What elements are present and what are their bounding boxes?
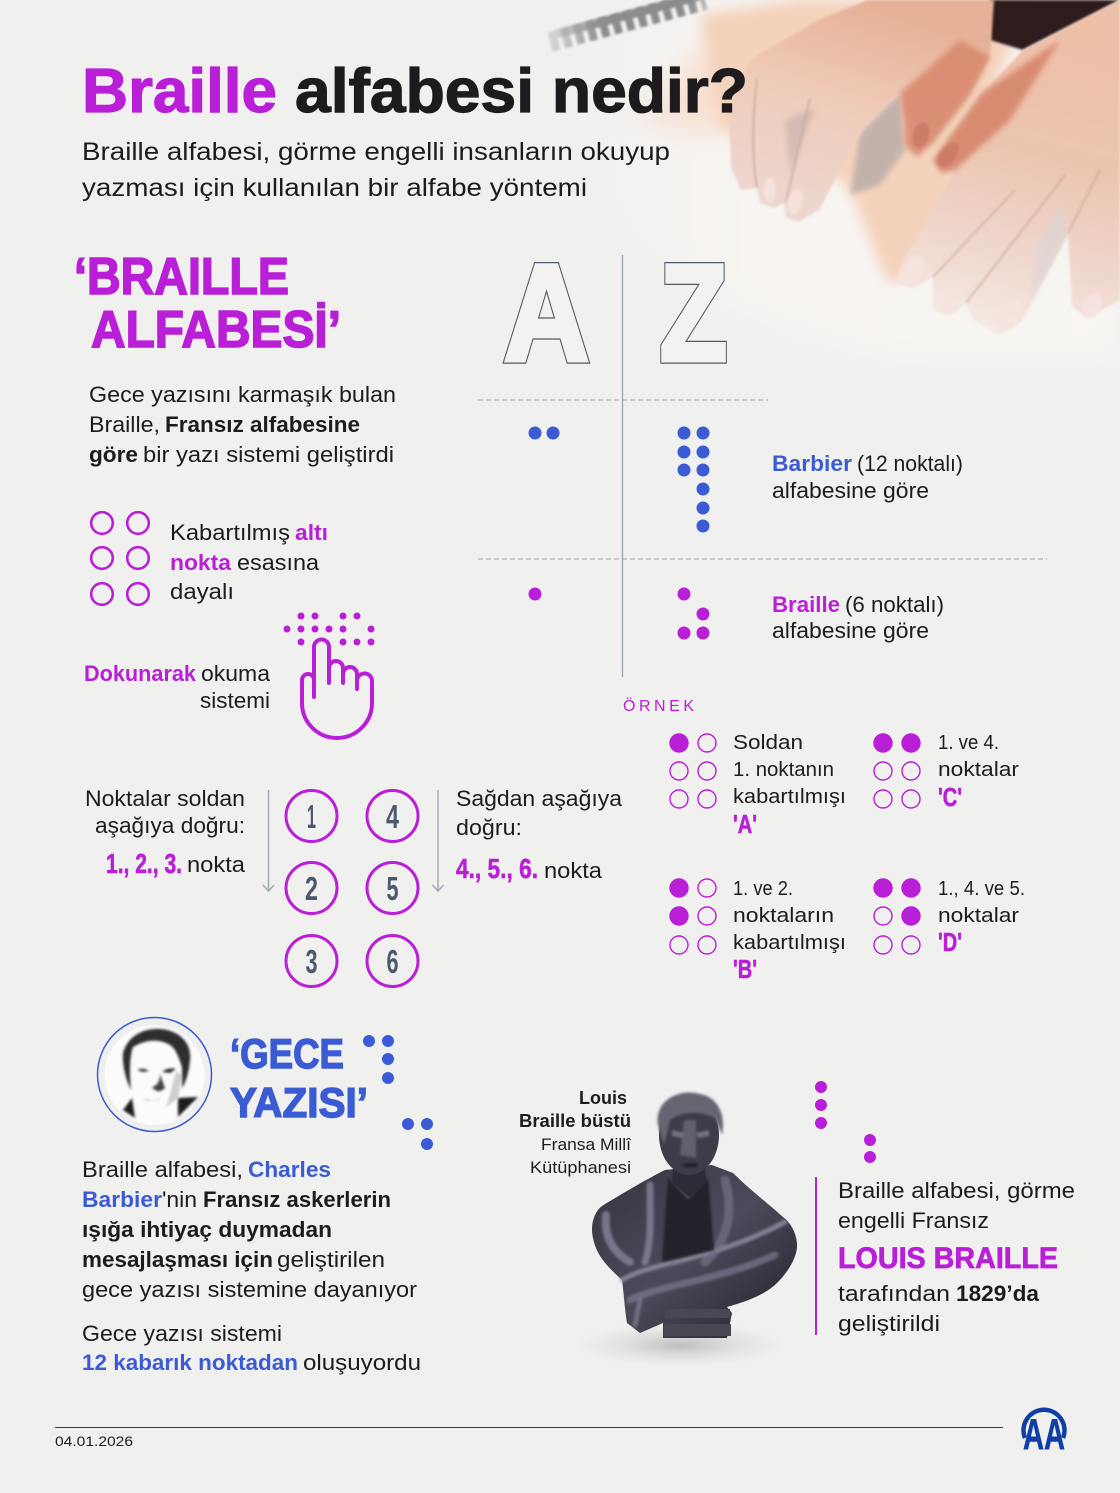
text block: left column dots: Noktalar soldan [85, 786, 245, 811]
text block: Gece yazısı: 'nin [162, 1187, 197, 1212]
date: 04.01.2026 [55, 1433, 133, 1449]
icon: hand touching dots [284, 612, 374, 738]
example C: 1. ve 4. [938, 732, 999, 754]
text block: six raised dots: Kabartılmış [170, 520, 290, 545]
text block: Gece yazısı: Fransız askerlerin [203, 1187, 391, 1212]
numbered dots 1 to 6: 1 [307, 798, 316, 835]
example D [874, 878, 1025, 957]
arrow: right column [432, 790, 444, 891]
braille Z: Braille [678, 588, 710, 640]
label: bust: Fransa Millî [541, 1136, 631, 1154]
example A: 1. noktanın [733, 759, 834, 781]
example A: kabartılmışı [733, 786, 846, 808]
label: Braille: alfabesine göre [772, 618, 929, 643]
text block: Gece yazısı: Barbier [82, 1187, 162, 1212]
label: Braille [772, 592, 944, 643]
example A: 'A' [733, 809, 757, 839]
text block: Louis Braille: LOUIS BRAILLE [838, 1242, 1058, 1275]
numbered dots 1 to 6: 6 [386, 943, 398, 980]
label: Barbier: alfabesine göre [772, 478, 929, 503]
chart dividers [478, 255, 1047, 677]
letters A and Z outline: A [504, 237, 589, 390]
text block: touch reading: sistemi [200, 688, 270, 713]
logo: Anadolu Agency: AA [1023, 1410, 1065, 1459]
text block: Louis Braille: tarafından [838, 1281, 950, 1306]
label: Barbier [772, 451, 963, 503]
example B: noktaların [733, 905, 834, 927]
text block: Gece yazısı: oluşuyordu [303, 1350, 421, 1375]
label: bust: Louis [579, 1088, 627, 1108]
braille Z: Barbier [678, 426, 710, 532]
text block: French alphabet: Braille, [89, 412, 160, 437]
text block: touch reading [84, 661, 271, 713]
letters A and Z outline [504, 237, 727, 390]
heading: Braille alfabesi: ‘BRAILLE [74, 248, 289, 306]
example C [874, 732, 1019, 812]
text block: Louis Braille: 1829’da [956, 1281, 1040, 1306]
text block: touch reading: Dokunarak [84, 661, 197, 686]
numbered dots 1 to 6: 2 [305, 870, 318, 907]
text block: Gece yazısı: Gece yazısı sistemi [82, 1321, 282, 1346]
portrait: Charles Barbier [98, 1018, 212, 1132]
text block: six raised dots: dayalı [170, 579, 234, 604]
label: Braille: Braille [772, 592, 840, 617]
title [82, 57, 748, 126]
text block: French alphabet: Fransız alfabesine [165, 412, 360, 437]
text block: six raised dots: altı [295, 520, 328, 545]
label: Braille: (6 noktalı) [845, 592, 944, 617]
text block: Gece yazısı: geliştirilen [277, 1247, 385, 1272]
text block: Louis Braille: geliştirildi [838, 1311, 940, 1336]
label: bust: Braille büstü [519, 1111, 631, 1131]
text block: right column dots: doğru: [456, 815, 522, 840]
text block: Gece yazısı: ışığa ihtiyaç duymadan [82, 1217, 332, 1242]
numbered dots 1 to 6 [286, 790, 418, 986]
letters A and Z outline: Z [660, 237, 727, 390]
text block: right column dots: nokta [544, 858, 603, 883]
heading: Gece yazısı: ‘GECE [230, 1030, 344, 1077]
text block: Gece yazısı [82, 1157, 421, 1375]
braille A: Barbier [528, 426, 560, 440]
numbered dots 1 to 6: 4 [386, 798, 399, 835]
photo: hands reading braille [540, 0, 1120, 358]
text block: right column dots: Sağdan aşağıya [456, 786, 623, 811]
heading: example: ÖRNEK [623, 697, 694, 715]
text block: six raised dots: nokta [170, 550, 232, 575]
letters A and Z outline: Z [660, 237, 727, 390]
subtitle [82, 138, 670, 202]
braille A: Braille [528, 588, 542, 600]
example A [670, 732, 846, 839]
example D: 1., 4. ve 5. [938, 878, 1025, 900]
text block: French alphabet: bir yazı sistemi geliştirdi [143, 442, 394, 467]
example B: 1. ve 2. [733, 878, 793, 900]
heading: Gece yazısı: YAZISI’ [230, 1079, 368, 1126]
text block: French alphabet: Gece yazısını karmaşık bulan [89, 382, 396, 407]
text block: Gece yazısı: gece yazısı sistemine dayanıyor [82, 1277, 417, 1302]
subtitle: yazması için kullanılan bir alfabe yöntemi [82, 174, 587, 202]
example B: 'B' [733, 954, 757, 984]
text block: Gece yazısı: 12 kabarık noktadan [82, 1350, 298, 1375]
text block: French alphabet: göre [89, 442, 138, 467]
label: Barbier: (12 noktalı) [857, 451, 963, 476]
heading: Braille alfabesi: ALFABESİ’ [91, 301, 341, 359]
logo: Anadolu Agency [1023, 1410, 1065, 1459]
text block: left column dots: nokta [187, 852, 246, 877]
text block: Gece yazısı: Charles [248, 1157, 331, 1182]
text block: left column dots: aşağıya doğru: [95, 813, 245, 838]
example B: kabartılmışı [733, 932, 846, 954]
dots: Louis Braille [815, 1081, 876, 1163]
title: Braille [82, 57, 277, 126]
example B [670, 878, 846, 984]
letters A and Z outline: A [504, 237, 589, 390]
example A: Soldan [733, 732, 803, 754]
example C: 'C' [938, 782, 962, 812]
numbered dots 1 to 6: 3 [306, 943, 318, 980]
text block: six raised dots: esasına [237, 550, 320, 575]
text block: Louis Braille [815, 1177, 1075, 1336]
example D: 'D' [938, 927, 962, 957]
text block: French alphabet [89, 382, 396, 467]
label: bust [519, 1088, 631, 1177]
text block: Gece yazısı: mesajlaşması için [82, 1247, 273, 1272]
photo: Louis Braille bust [575, 1092, 797, 1367]
icon: six empty dots [91, 512, 149, 605]
numbered dots 1 to 6: 5 [386, 870, 398, 907]
example D: noktalar [938, 905, 1019, 927]
label: bust: Kütüphanesi [530, 1159, 631, 1177]
arrow: left column [263, 790, 274, 891]
text block: six raised dots [170, 520, 328, 604]
footer rule [55, 1427, 1003, 1428]
text block: touch reading: okuma [201, 661, 271, 686]
title: alfabesi nedir? [295, 57, 748, 126]
text block: Gece yazısı: Braille alfabesi, [82, 1157, 243, 1182]
label: Barbier: Barbier [772, 451, 852, 476]
text block: right column dots: 4., 5., 6. [456, 853, 538, 884]
text block: left column dots [85, 786, 246, 879]
subtitle: Braille alfabesi, görme engelli insanların okuyup [82, 138, 670, 166]
example C: noktalar [938, 759, 1019, 781]
heading: Braille alfabesi [74, 248, 341, 359]
heading: Gece yazısı [230, 1030, 368, 1126]
text block: right column dots [456, 786, 623, 884]
text block: Louis Braille: engelli Fransız [838, 1208, 989, 1233]
dots: Gece yazısı [363, 1035, 433, 1150]
text block: Louis Braille: Braille alfabesi, görme [838, 1178, 1075, 1203]
text block: left column dots: 1., 2., 3. [106, 848, 182, 879]
